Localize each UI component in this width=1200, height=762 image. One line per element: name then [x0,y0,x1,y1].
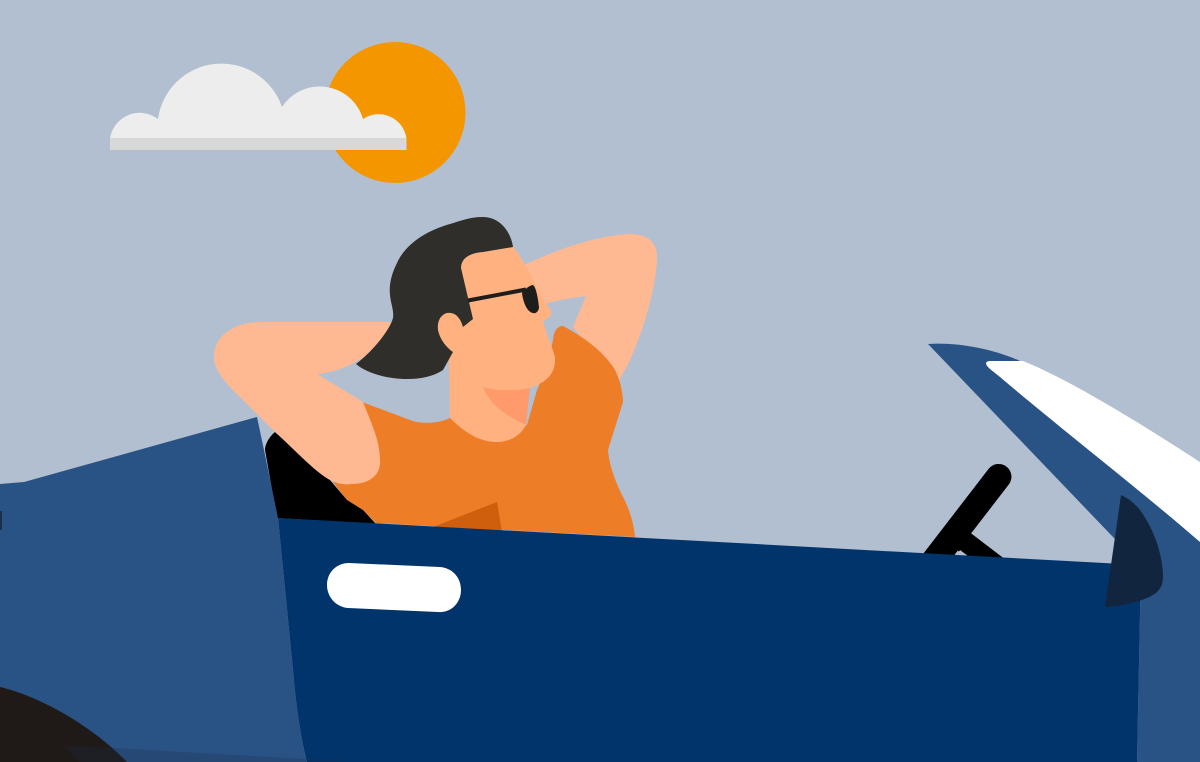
left edge mark [0,511,2,530]
shirt fold shadow [433,502,502,532]
side mirror [1105,495,1163,607]
car rear body panel [0,417,307,762]
car door [278,518,1141,762]
wheel arch: rear wheel [0,687,127,762]
windshield glass highlight [986,361,1200,542]
windshield frame [928,344,1200,762]
man's back arm (right, behind head) [510,234,657,382]
underbody shadow [65,746,350,762]
mouth [483,387,530,425]
man's neck and face [449,247,555,442]
man's front arm (left, behind head) [214,322,392,484]
ear [438,313,463,352]
icon: sun [324,42,466,183]
hair [356,217,513,379]
seat back [265,432,376,524]
door handle [327,563,461,612]
steering wheel [926,477,1006,571]
sunglasses [468,285,539,313]
man's torso: orange t-shirt [333,326,635,537]
icon: cloud [110,64,406,150]
